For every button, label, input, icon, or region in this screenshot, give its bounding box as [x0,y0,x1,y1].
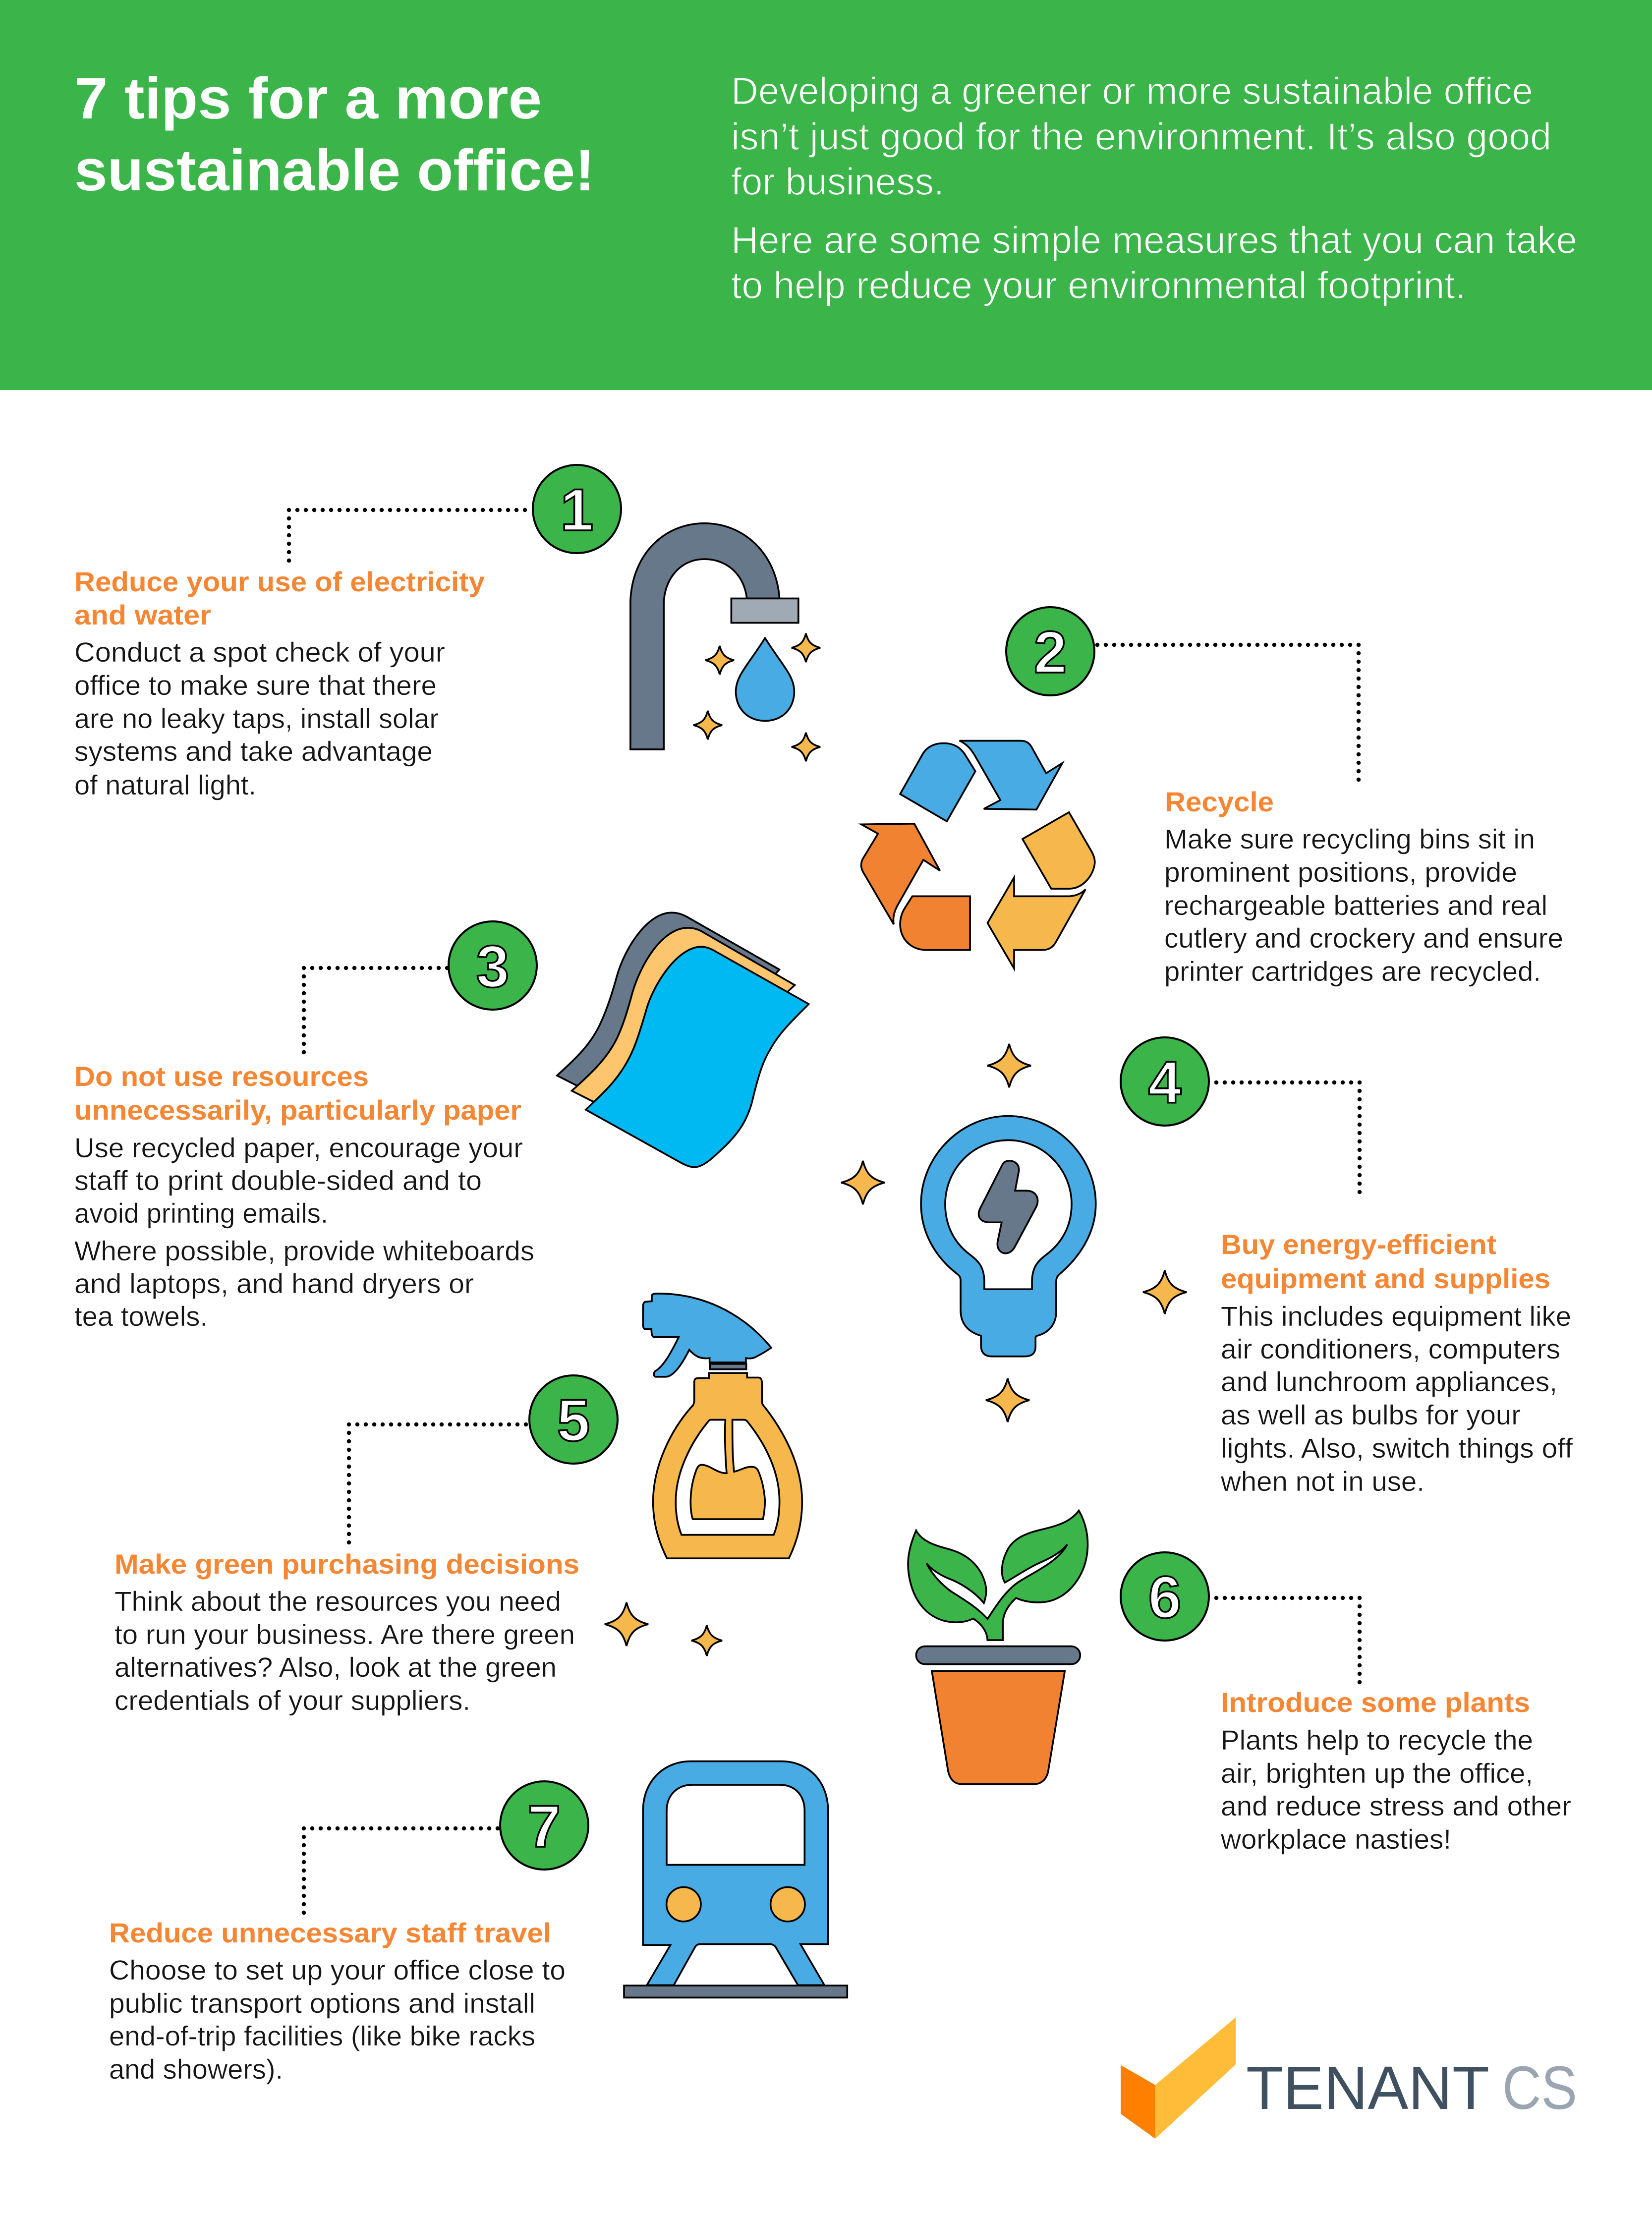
text block: tip 7: and showers). [109,2053,283,2085]
heading: tip 1: and water [74,599,211,630]
icon: train [624,1761,847,1997]
number badge 2 [1006,607,1094,695]
text block: tip 2: rechargeable batteries and real [1164,890,1547,921]
text block: tip 6: air, brighten up the office, [1221,1758,1533,1789]
text block: tip 4: This includes equipment like [1221,1301,1571,1332]
icon: spray bottle with sparkles [605,1294,802,1656]
heading: tip 1: Reduce your use of electricity [74,566,485,597]
heading: tip 4: equipment and supplies [1221,1263,1550,1294]
number badge 6 [1121,1552,1209,1641]
number badge 3: 3 [476,933,509,1000]
text block: tip 5: to run your business. Are there green [114,1619,575,1650]
text block: tip 5: credentials of your suppliers. [114,1685,470,1716]
heading: tip 7: Reduce unnecessary staff travel [109,1917,551,1948]
text block: tip 5: alternatives? Also, look at the green [114,1651,557,1683]
text block: tip 7: end-of-trip facilities (like bike racks [109,2020,535,2051]
text block: tip 4: lights. Also, switch things off [1221,1432,1573,1464]
panel: tip 3 paper [74,921,537,1332]
text block: tip 6 [1220,1724,1571,1855]
text block: tip 1 [74,636,445,800]
number badge 4: 4 [1148,1049,1182,1116]
text block: tip 3: and laptops, and hand dryers or [74,1268,474,1299]
text block: tip 3: tea towels. [74,1301,208,1332]
text block: tip 3: Use recycled paper, encourage your [74,1132,523,1163]
text block: tip 3: staff to print double-sided and to [74,1165,482,1196]
logo wordmark: CS [1502,2054,1577,2122]
heading: tip 3: Do not use resources [74,1061,369,1092]
heading: tip 5: Make green purchasing decisions [114,1548,579,1580]
text block: tip 7 [109,1954,566,2085]
number badge 4 [1121,1037,1209,1126]
header band [0,0,1652,390]
intro text: to help reduce your environmental footprint. [731,264,1466,307]
number badge 2: 2 [1034,619,1067,685]
intro text [731,70,1577,307]
text block: tip 4 [1220,1301,1573,1497]
panel: tip 6 plants [1121,1552,1571,1855]
text block: tip 6: workplace nasties! [1220,1823,1451,1855]
panel: tip 2 recycle [1006,607,1563,987]
icon: recycling arrows [861,741,1095,968]
text block: tip 1: systems and take advantage [74,736,433,767]
icon: tap with water drop [630,523,820,761]
title: 7 tips for a more [74,66,542,131]
text block: tip 2: Make sure recycling bins sit in [1164,823,1535,854]
text block: tip 4: air conditioners, computers [1221,1333,1560,1364]
heading: tip 2: Recycle [1165,786,1274,817]
text block: tip 1: of natural light. [74,769,256,800]
text block: tip 6: and reduce stress and other [1221,1790,1571,1821]
icon: logo check mark [1121,2017,1236,2139]
text block: tip 7: Choose to set up your office close to [109,1954,566,1986]
icon: light bulb with sparkles [841,1044,1187,1422]
panel: tip 7 staff travel [109,1781,588,2085]
logo wordmark: TENANT [1246,2054,1489,2122]
heading: tip 1 [74,566,485,630]
text block: tip 4: as well as bulbs for your [1221,1399,1521,1430]
text block: tip 4: when not in use. [1220,1466,1424,1497]
number badge 5 [529,1375,618,1464]
heading: tip 4: Buy energy-efficient [1221,1229,1496,1260]
text block: tip 2: printer cartridges are recycled. [1164,956,1541,987]
panel: tip 1 electricity and water [74,465,621,800]
heading: tip 3: unnecessarily, particularly paper [74,1094,521,1126]
heading: tip 6: Introduce some plants [1221,1687,1530,1718]
number badge 7: 7 [528,1793,561,1860]
panel: tip 4 energy-efficient equipment [1121,1037,1573,1497]
intro text: isn’t just good for the environment. It’s also good [731,115,1551,158]
text block: tip 1: are no leaky taps, install solar [74,703,439,734]
text block: tip 7: public transport options and install [109,1988,535,2019]
number badge 1 [533,465,621,553]
title [74,66,595,203]
heading: tip 4 [1221,1229,1550,1294]
text block: tip 5 [114,1586,575,1716]
text block: tip 1: Conduct a spot check of your [74,636,445,668]
panel: tip 5 green purchasing [114,1375,618,1716]
text block: tip 2: cutlery and crockery and ensure [1164,922,1563,954]
text block: tip 3: Where possible, provide whiteboards [74,1235,534,1266]
text block: tip 3 [74,1132,534,1332]
heading: tip 3 [74,1061,521,1126]
text block: tip 6: Plants help to recycle the [1221,1724,1533,1756]
number badge 3 [449,921,537,1010]
text block: tip 4: and lunchroom appliances, [1221,1366,1557,1397]
title: sustainable office! [74,138,595,203]
number badge 7 [500,1781,588,1870]
text block: tip 3: avoid printing emails. [74,1197,328,1229]
intro text: Here are some simple measures that you can take [731,219,1577,262]
intro text: for business. [731,161,944,203]
text block: tip 5: Think about the resources you need [114,1586,561,1617]
icon: stacked paper sheets [557,912,809,1167]
number badge 5: 5 [557,1387,590,1454]
intro text: Developing a greener or more sustainable office [731,70,1533,113]
text block: tip 2: prominent positions, provide [1164,856,1517,888]
text block: tip 1: office to make sure that there [74,670,437,701]
text block: tip 2 [1164,823,1563,987]
icon: potted plant [908,1511,1088,1784]
number badge 6: 6 [1148,1564,1181,1631]
number badge 1: 1 [561,477,593,543]
logo: Tenant CS [1121,2017,1577,2139]
